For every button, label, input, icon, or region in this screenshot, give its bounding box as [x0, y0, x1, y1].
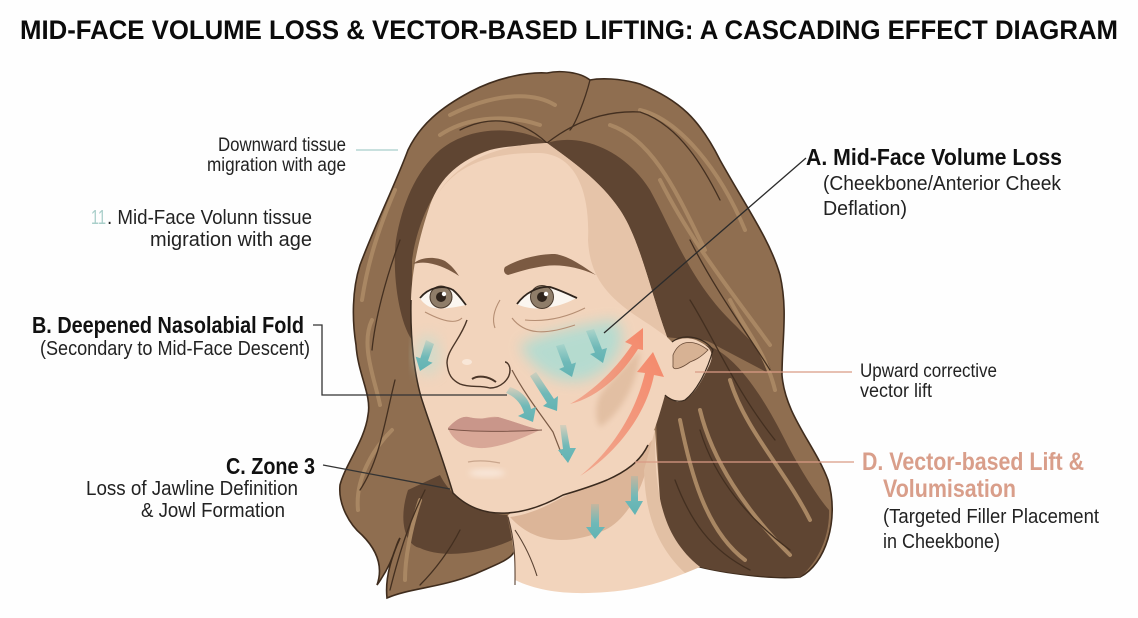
- label: downward tissue migration: migration with age: [207, 155, 346, 176]
- cheek shadow: [596, 350, 640, 427]
- ear outline: [665, 337, 713, 401]
- salmon upward arrows: [570, 328, 664, 476]
- nose: [447, 320, 510, 388]
- label C: zone 3: & Jowl Formation: [141, 499, 285, 522]
- face skin: [411, 143, 712, 513]
- label D: vector-based lift and volumisation: (Targeted Filler Placement: [883, 505, 1099, 528]
- face illustration: [340, 72, 832, 598]
- label: mid-face volume tissue migration: 11: [91, 206, 106, 229]
- face outline: [411, 300, 648, 513]
- leader lines: [313, 150, 854, 489]
- label C: zone 3: Loss of Jawline Definition: [86, 477, 298, 500]
- label D: vector-based lift and volumisation: in Cheekbone): [883, 530, 1000, 553]
- label A: mid-face volume loss: [806, 144, 1062, 220]
- right eyebrow: [504, 254, 596, 275]
- forehead side shading: [432, 143, 667, 337]
- label: mid-face volume tissue migration: [91, 206, 312, 251]
- hair strands: [358, 96, 810, 580]
- label A: mid-face volume loss: Deflation): [823, 197, 907, 220]
- hair shading: [395, 130, 829, 577]
- label: downward tissue migration: [207, 135, 346, 176]
- label C: zone 3: [86, 453, 315, 522]
- nostril and tip: [462, 359, 496, 382]
- label B: deepened nasolabial fold: B. Deepened Nasolabial Fold: [32, 312, 304, 338]
- label A: mid-face volume loss: A. Mid-Face Volume Loss: [806, 144, 1062, 170]
- neck side shadow: [644, 430, 700, 573]
- teal left cheek zone: [416, 335, 440, 375]
- lips: [448, 417, 542, 448]
- label A: mid-face volume loss: (Cheekbone/Anterior Cheek: [823, 172, 1062, 195]
- ear inner: [673, 342, 708, 369]
- chin crease: [468, 461, 505, 477]
- neck lines: [508, 517, 537, 585]
- label B: deepened nasolabial fold: (Secondary to Mid-Face Descent): [40, 337, 310, 360]
- label: upward corrective vector lift: Upward corrective: [860, 361, 997, 382]
- hair silhouette: [340, 72, 832, 598]
- left eyebrow: [413, 258, 459, 276]
- label: mid-face volume tissue migration: . Mid-Face Volunn tissue: [107, 206, 312, 229]
- label D: vector-based lift and volumisation: [862, 448, 1099, 553]
- neck shadow: [510, 440, 652, 540]
- teal downward arrows: [416, 329, 643, 539]
- label: mid-face volume tissue migration: migration with age: [150, 228, 312, 251]
- right eye: [517, 286, 577, 308]
- neck: [508, 430, 700, 593]
- label B: deepened nasolabial fold: [32, 312, 310, 360]
- teal mid-face zone: [520, 320, 622, 381]
- label: upward corrective vector lift: vector lift: [860, 381, 933, 402]
- under-eye and nose lines: [425, 300, 585, 332]
- label: upward corrective vector lift: [860, 361, 997, 402]
- title: MID-FACE VOLUME LOSS & VECTOR-BASED LIFTING: A CASCADING EFFECT DIAGRAM: [20, 15, 1118, 45]
- nasolabial fold: [512, 370, 562, 455]
- left eye: [420, 286, 466, 308]
- label D: vector-based lift and volumisation: Volumisation: [883, 475, 1016, 503]
- label D: vector-based lift and volumisation: D. Vector-based Lift &: [862, 448, 1084, 476]
- label C: zone 3: C. Zone 3: [226, 453, 315, 479]
- label: downward tissue migration: Downward tissue: [218, 135, 346, 156]
